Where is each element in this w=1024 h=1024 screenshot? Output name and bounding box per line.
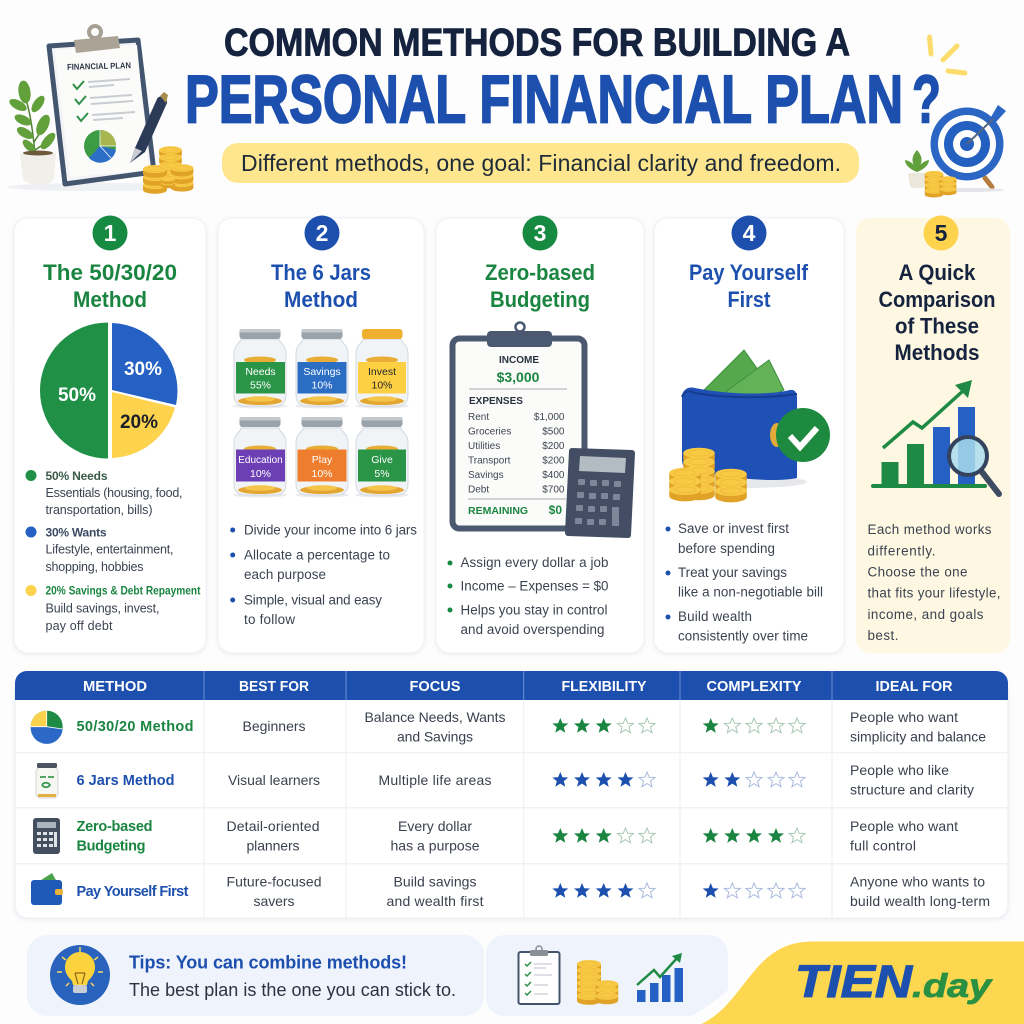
row: zero-based budgeting: planners [246, 838, 300, 854]
row: 6 jars method: structure and clarity [850, 782, 974, 798]
jar: invest: Invest [368, 366, 396, 378]
bullet list: before spending [678, 541, 775, 556]
description: income, and goals [868, 607, 984, 622]
description: Each method works [868, 522, 992, 537]
bullet list [666, 521, 823, 644]
description: best. [868, 628, 898, 643]
row: 50/30/20 method: and Savings [397, 728, 473, 744]
heading: Comparison [878, 287, 996, 312]
pie chart: 50% [58, 385, 96, 406]
icon: rays [930, 37, 965, 73]
jar: play [295, 417, 349, 498]
heading: The 6 Jars [271, 260, 371, 285]
table header: FOCUS [410, 679, 461, 695]
clipboard budget: EXPENSES [469, 396, 523, 407]
jar: education: Education [238, 455, 283, 466]
icon: wallet with money and check [682, 350, 830, 488]
heading: Zero-based [485, 260, 595, 285]
row: 6 jars method: 6 Jars Method [76, 773, 174, 789]
jar: invest [355, 329, 409, 408]
panel: tips [27, 935, 484, 1016]
icon: coins [577, 960, 618, 1005]
row: 6 jars method: People who like [850, 762, 949, 778]
icon: calculator [568, 451, 632, 535]
bar chart with arrow and magnifier [873, 380, 999, 494]
description: Choose the one [868, 564, 968, 580]
legend: pay off debt [46, 619, 113, 633]
row: zero-based budgeting: has a purpose [390, 838, 480, 854]
bullet list: Treat your savings [678, 565, 787, 580]
table header: BEST FOR [239, 679, 309, 695]
row: pay yourself first: Pay Yourself First [76, 884, 189, 900]
clipboard budget: Savings [468, 470, 504, 481]
description: that fits your lifestyle, [868, 586, 1000, 600]
logo: TIEN [795, 956, 914, 1007]
badge 5: 5 [935, 220, 948, 246]
jar: education [233, 417, 287, 498]
table header: IDEAL FOR [876, 679, 953, 695]
icon: clipboard financial plan: FINANCIAL PLAN [67, 60, 131, 72]
heading: First [728, 287, 771, 312]
legend: 50% Needs [46, 469, 108, 483]
table header: FLEXIBILITY [562, 679, 647, 695]
jar: needs: Needs [245, 366, 276, 378]
legend: Build savings, invest, [46, 602, 160, 616]
clipboard budget: $200 [542, 456, 565, 466]
jar: play: 10% [311, 468, 333, 480]
icon: clipboard financial plan [7, 26, 183, 191]
bullet list: Divide your income into 6 jars [244, 522, 417, 538]
badge 2: 2 [316, 220, 328, 246]
icon: pen [130, 92, 168, 163]
badge 4: 4 [743, 220, 756, 246]
clipboard budget: $0 [549, 503, 562, 517]
legend: 20% Savings & Debt Repayment [46, 584, 200, 598]
heading [485, 260, 595, 312]
badge 2 [304, 216, 340, 250]
row: 50/30/20 method: Balance Needs, Wants [364, 709, 506, 725]
jar: education: 10% [250, 468, 271, 480]
row: zero-based budgeting: Budgeting [76, 838, 146, 854]
clipboard budget: Debt [468, 484, 489, 496]
icon: growth chart [637, 953, 683, 1002]
bullet list [448, 555, 608, 637]
row: 50/30/20 method: People who want [850, 709, 958, 725]
legend [26, 469, 200, 633]
subtitle pill: Different methods, one goal: Financial clarity and freedom. [241, 150, 841, 176]
heading: Method [73, 287, 147, 312]
legend: 30% Wants [46, 526, 107, 540]
bullet list: Income – Expenses = $0 [460, 578, 608, 594]
table header: METHOD [83, 679, 147, 695]
row: 6 jars method: Visual learners [228, 772, 320, 788]
clipboard budget: $400 [542, 470, 565, 481]
row: 50/30/20 method: simplicity and balance [850, 728, 986, 744]
panel: 6 jars method [218, 216, 424, 653]
badge 3: 3 [534, 220, 546, 246]
jar: invest: 10% [371, 380, 393, 392]
logo: .day [912, 967, 993, 1004]
clipboard budget: Rent [468, 412, 489, 423]
row: zero-based budgeting: full control [850, 838, 916, 854]
panel: zero-based budgeting [436, 216, 644, 653]
badge 4 [732, 216, 766, 250]
clipboard budget [452, 322, 584, 528]
heading: of These [895, 314, 979, 338]
row: zero-based budgeting: Zero-based [76, 819, 152, 835]
bullet list: each purpose [244, 567, 326, 582]
badge 1: 1 [104, 220, 117, 246]
row: 50/30/20 method: Beginners [242, 718, 306, 734]
clipboard budget: $1,000 [534, 412, 565, 423]
icon: coin stacks left [143, 146, 193, 194]
jar: give: Give [371, 454, 393, 466]
heading: A Quick [898, 260, 976, 285]
row: zero-based budgeting: Detail-oriented [226, 818, 320, 834]
clipboard budget: $500 [542, 426, 565, 438]
badge 5 [924, 216, 958, 250]
bullet list: like a non-negotiable bill [678, 584, 823, 600]
row: 50/30/20 method: 50/30/20 Method [76, 719, 194, 735]
legend: Lifestyle, entertainment, [46, 542, 174, 556]
question mark: ? [912, 62, 941, 138]
clipboard budget: $3,000 [497, 369, 540, 385]
clipboard budget: REMAINING [468, 505, 528, 517]
jar: savings: 10% [311, 380, 333, 392]
jar: play: Play [312, 454, 333, 466]
legend: shopping, hobbies [46, 560, 144, 574]
icon: coin stacks [669, 448, 747, 502]
panel: pay yourself first [654, 216, 844, 653]
description [868, 522, 1000, 643]
legend: Essentials (housing, food, [46, 486, 182, 500]
row: 6 jars method: Multiple life areas [378, 772, 492, 788]
panel: 50/30/20 method [14, 216, 206, 653]
row: pay yourself first [31, 873, 990, 909]
row: zero-based budgeting: Every dollar [398, 818, 472, 834]
jar: give [355, 417, 409, 498]
tips heading: Tips: You can combine methods! [129, 952, 407, 972]
description: differently. [868, 544, 936, 558]
icon: lightbulb [50, 945, 110, 1005]
bullet list: Assign every dollar a job [460, 555, 608, 570]
clipboard budget: $200 [542, 441, 565, 452]
row: pay yourself first: savers [254, 893, 294, 909]
bullet list: Save or invest first [678, 521, 789, 536]
pie chart: 30% [124, 359, 162, 380]
clipboard budget: INCOME [499, 355, 539, 366]
heading [43, 260, 177, 312]
row: pay yourself first: Build savings [394, 874, 476, 890]
row: zero-based budgeting [33, 818, 958, 854]
jar: needs: 55% [250, 380, 271, 392]
title [185, 22, 941, 138]
heading: Methods [894, 340, 980, 365]
subtitle pill [222, 143, 859, 183]
icon: checklist clipboard [518, 946, 560, 1004]
bullet list: Build wealth [678, 609, 752, 624]
icon: target with arrow [930, 105, 1006, 192]
panel: quick comparison [856, 216, 1010, 653]
jar: savings [295, 329, 349, 408]
title line 1: COMMON METHODS FOR BUILDING A [224, 22, 850, 64]
jar: needs [233, 329, 287, 408]
clipboard budget: Utilities [468, 441, 500, 452]
badge 1 [92, 216, 128, 250]
heading: Budgeting [490, 287, 590, 312]
icon: plant in pot [7, 80, 58, 185]
bullet list: Helps you stay in control [460, 602, 608, 618]
clipboard budget: $700 [542, 484, 565, 496]
pie chart: 20% [120, 412, 158, 433]
row: pay yourself first: and wealth first [386, 893, 484, 909]
row: 6 jars method [36, 762, 974, 798]
bullet list: Simple, visual and easy [244, 592, 382, 608]
bullet list: Allocate a percentage to [244, 548, 390, 562]
table header: COMPLEXITY [706, 679, 802, 695]
pie chart [40, 322, 177, 458]
row: pay yourself first: Future-focused [226, 874, 322, 890]
bullet list: consistently over time [678, 628, 808, 644]
jar: savings: Savings [303, 366, 341, 378]
row: 50/30/20 method [31, 709, 986, 744]
bullet list: to follow [244, 612, 295, 627]
panel: tips icons [486, 935, 728, 1016]
row: zero-based budgeting: People who want [850, 818, 958, 834]
bullet list: and avoid overspending [460, 622, 604, 637]
bullet list [230, 522, 417, 627]
brand footer [693, 940, 1024, 1024]
logo [795, 956, 993, 1007]
heading: Pay Yourself [689, 260, 809, 285]
heading [271, 260, 371, 312]
badge 3 [522, 216, 558, 250]
icon: small plant and coins [905, 150, 956, 198]
clipboard budget: Groceries [468, 426, 511, 438]
row: pay yourself first: build wealth long-term [850, 893, 990, 909]
heading: The 50/30/20 [43, 260, 177, 285]
row: pay yourself first: Anyone who wants to [850, 874, 985, 890]
tips body: The best plan is the one you can stick to. [129, 980, 456, 1000]
heading [878, 260, 996, 365]
legend: transportation, bills) [46, 503, 152, 517]
table header [83, 679, 953, 695]
comparison table [15, 671, 1008, 918]
heading [689, 260, 809, 312]
heading: Method [284, 287, 358, 312]
jar: give: 5% [374, 468, 390, 480]
clipboard budget: Transport [468, 456, 511, 466]
